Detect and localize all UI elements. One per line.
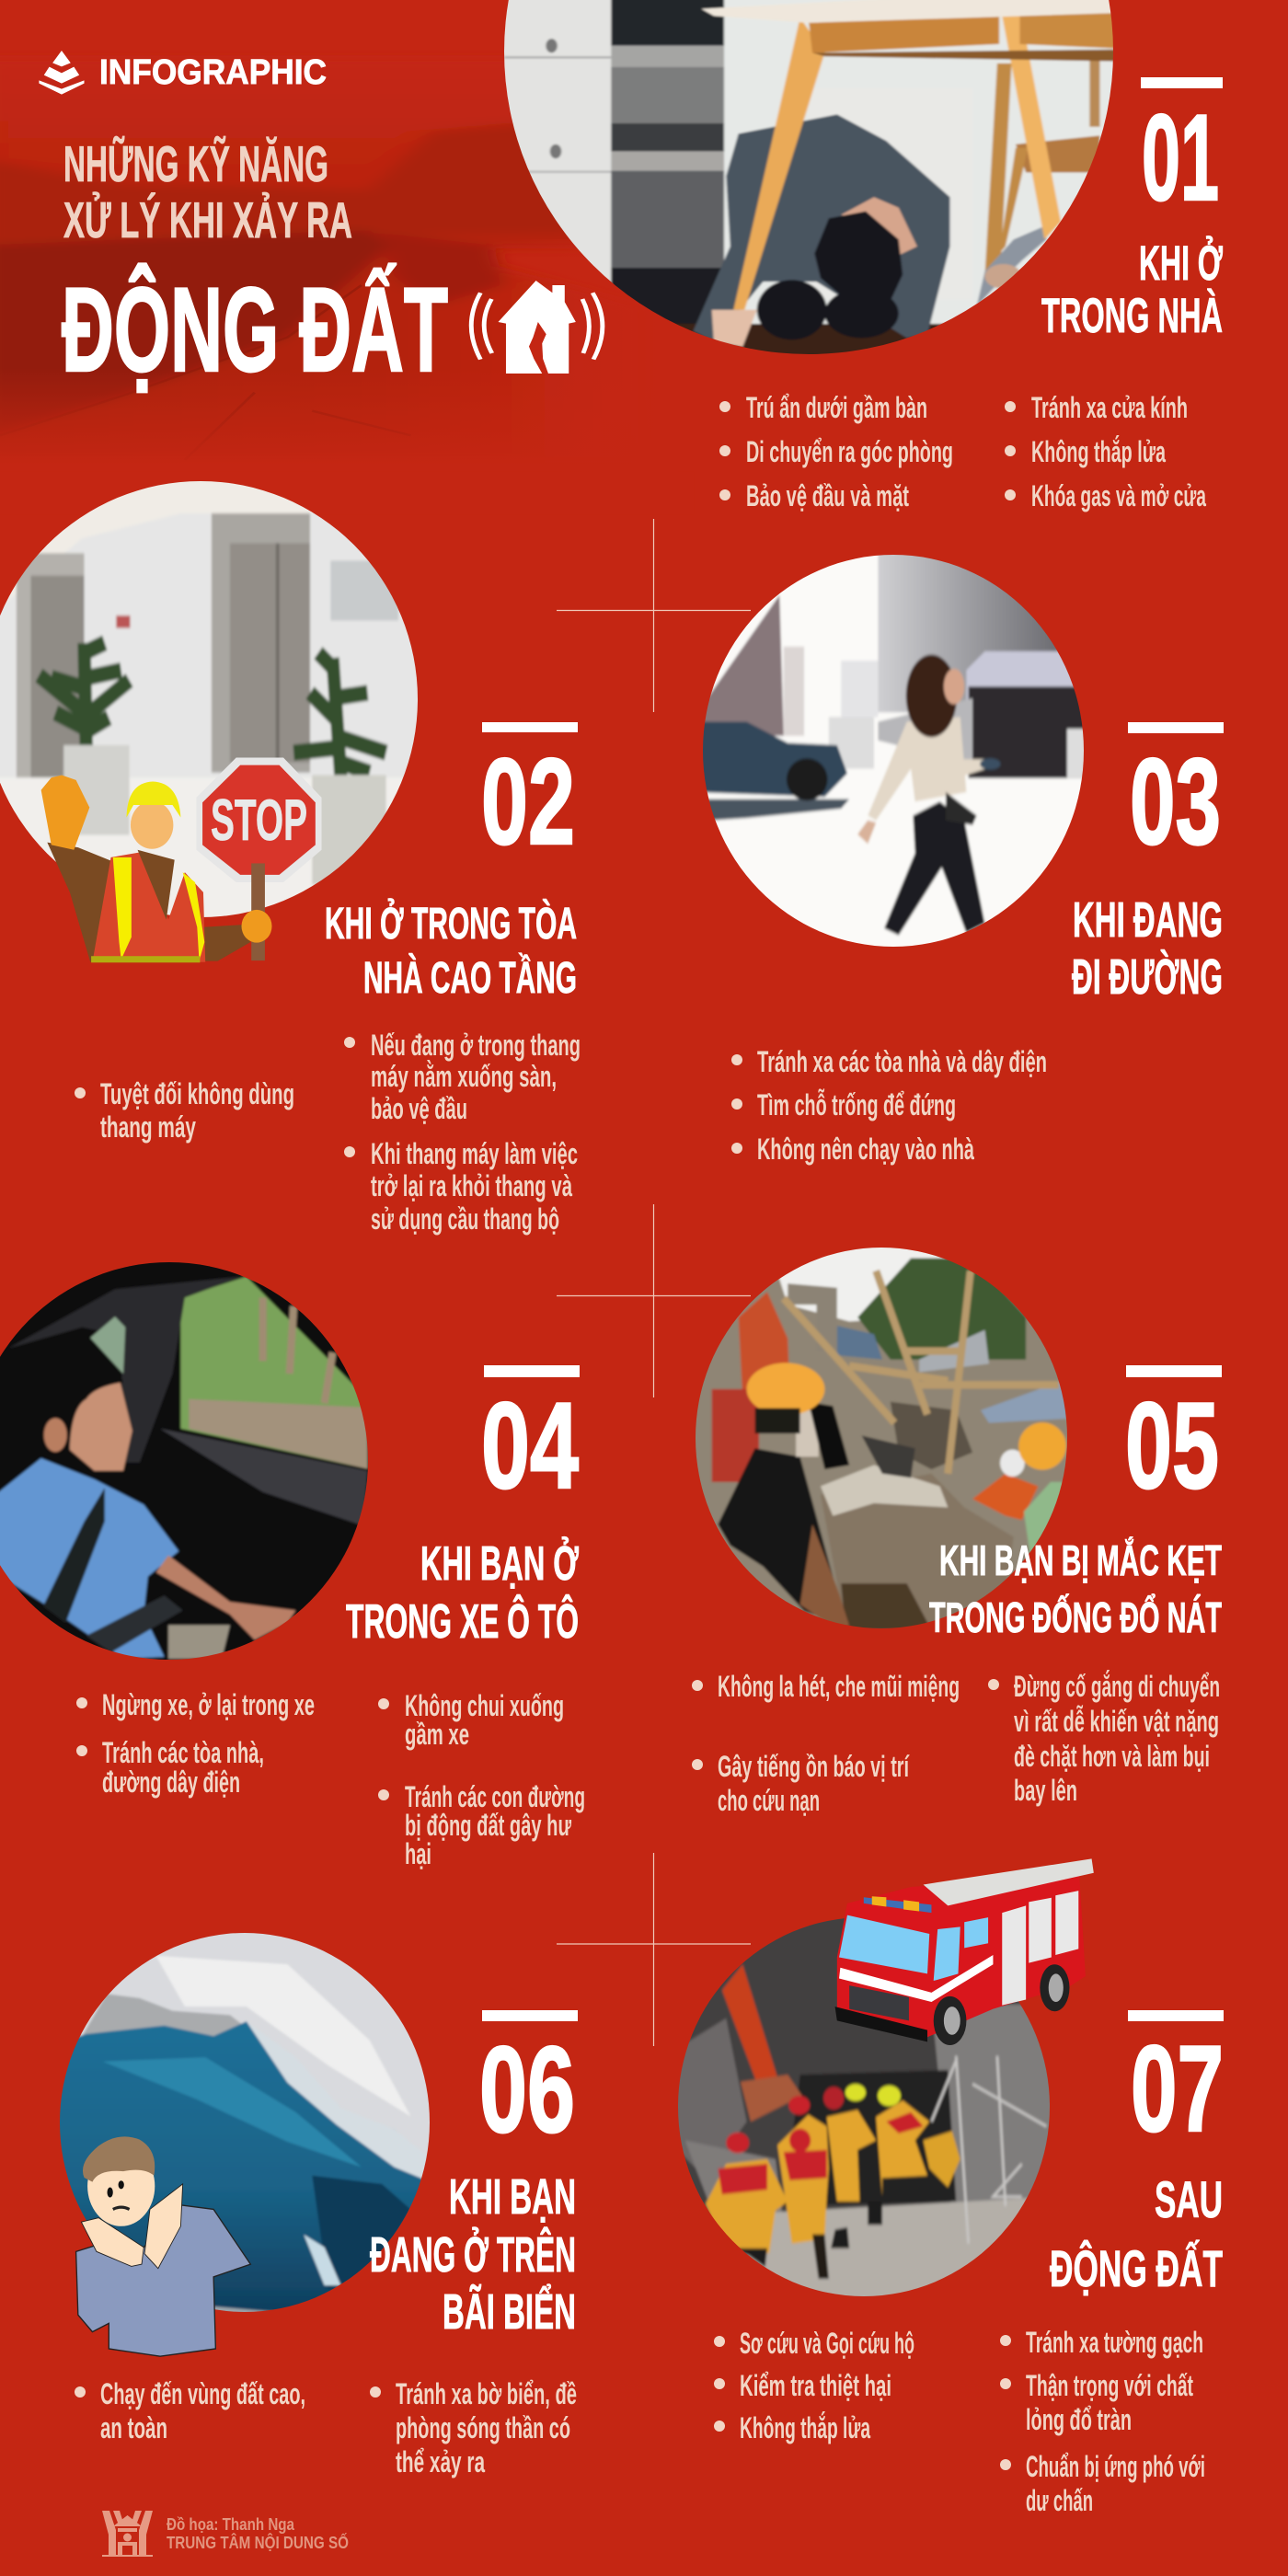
number 07: [1128, 2010, 1224, 2157]
panel: 05 trapped: [689, 1241, 1222, 1817]
bullets 07: Kiểm tra thiệt hại: [740, 2369, 891, 2402]
photo: man under table: [504, 0, 1113, 354]
bullets 02: [75, 1029, 581, 1236]
bullets 03: [731, 1045, 1047, 1166]
title: NHỮNG KỸ NĂNG: [63, 135, 328, 192]
bullets 04: [76, 1688, 585, 1870]
heading 06: ĐANG Ở TRÊN: [370, 2226, 576, 2283]
bullets 01: Không thắp lửa: [1031, 435, 1166, 468]
bullets 03: Không nên chạy vào nhà: [757, 1133, 974, 1166]
number 04: [481, 1365, 580, 1514]
brand name: INFOGRAPHIC: [99, 53, 327, 92]
photo: woman crossing street: [697, 544, 1092, 957]
panel: 06 on the beach: [53, 1926, 578, 2478]
bullets 02: sử dụng cầu thang bộ: [371, 1202, 559, 1236]
number 03: [1128, 722, 1224, 870]
bullets 03: Tránh xa các tòa nhà và dây điện: [757, 1045, 1047, 1078]
bullets 01: Trú ẩn dưới gầm bàn: [746, 391, 927, 424]
bullets 02: máy nằm xuống sàn,: [371, 1060, 557, 1093]
bullets 01: Bảo vệ đầu và mặt: [746, 479, 909, 512]
bullets 06: phòng sóng thần có: [396, 2411, 570, 2444]
panel: 04 in the car: [0, 1251, 585, 1870]
heading 04: [346, 1536, 579, 1649]
bullets 05: [692, 1670, 1220, 1817]
heading 02: KHI Ở TRONG TÒA: [325, 898, 577, 949]
bullets 04: bị động đất gây hư: [405, 1809, 572, 1842]
photo: big wave: [53, 1926, 435, 2319]
icon: fire truck: [835, 1858, 1094, 2045]
bullets 02: Tuyệt đối không dùng: [100, 1077, 294, 1110]
bullets 02: Nếu đang ở trong thang: [371, 1029, 581, 1062]
bullets 06: [75, 2377, 577, 2478]
bullets 04: Ngừng xe, ở lại trong xe: [102, 1688, 315, 1721]
footer credit: TRUNG TÂM NỘI DUNG SỐ: [167, 2533, 349, 2552]
bullets 02: trở lại ra khỏi thang và: [371, 1169, 572, 1202]
icon: shaking house: [471, 281, 603, 374]
heading 07: [1050, 2170, 1223, 2297]
title: [62, 135, 448, 397]
number 06: 06: [479, 2022, 575, 2158]
bullets 04: Không chui xuống: [405, 1689, 564, 1722]
panel: 07 after the earthquake: [673, 1858, 1224, 2517]
heading 04: KHI BẠN Ở: [420, 1536, 579, 1591]
number 07: 07: [1131, 2021, 1224, 2157]
number 02: 02: [481, 734, 575, 870]
panel: 03 walking: [697, 544, 1224, 1166]
heading 03: [1072, 892, 1223, 1005]
bullets 05: Không la hét, che mũi miệng: [718, 1670, 960, 1703]
heading 07: SAU: [1155, 2170, 1223, 2228]
footer credit: Đồ họa: Thanh Nga: [167, 2515, 295, 2534]
footer credit: [167, 2515, 349, 2552]
number 04: 04: [481, 1378, 579, 1514]
number 01: 01: [1142, 90, 1219, 226]
bullets 07: lỏng đổ tràn: [1026, 2403, 1132, 2436]
heading 06: BÃI BIỂN: [443, 2284, 576, 2340]
bullets 07: [714, 2326, 1205, 2517]
background photo: cracked road: [0, 58, 694, 514]
bullets 04: đường dây điện: [102, 1765, 240, 1799]
bullets 01: Di chuyển ra góc phòng: [746, 435, 953, 468]
bullets 06: an toàn: [100, 2411, 167, 2444]
bullets 05: Gây tiếng ồn báo vị trí: [718, 1750, 910, 1783]
number 02: [481, 722, 578, 870]
panel: 01 indoors: [502, 0, 1223, 512]
icon: worker with stop sign: STOP: [211, 788, 307, 853]
bullets 07: Sơ cứu và Gọi cứu hộ: [740, 2327, 914, 2360]
footer logo: [102, 2511, 153, 2557]
bullets 01: Tránh xa cửa kính: [1031, 391, 1188, 424]
photo: boy in car: [0, 1251, 378, 1670]
panel: 02 high-rise: [0, 474, 581, 1236]
bullets 06: thể xảy ra: [396, 2445, 485, 2478]
bullets 02: Khi thang máy làm việc: [371, 1137, 578, 1170]
bullets 07: dư chấn: [1026, 2484, 1093, 2517]
bullets 02: thang máy: [100, 1110, 196, 1144]
bullets 06: Chạy đến vùng đất cao,: [100, 2377, 305, 2410]
bullets 04: Tránh các tòa nhà,: [102, 1736, 264, 1769]
photo: elevators: [0, 474, 427, 927]
heading 02: [325, 898, 577, 1003]
bullets 03: Tìm chỗ trống để đứng: [757, 1088, 956, 1121]
number 03: 03: [1130, 734, 1221, 870]
bullets 04: Tránh các con đường: [405, 1780, 585, 1813]
photo: rescuers in rubble: [689, 1241, 1075, 1639]
number 05: [1125, 1365, 1222, 1514]
icon: worker with stop sign: [41, 758, 322, 962]
icon: man crossing arms: [76, 2136, 250, 2356]
heading 05: [929, 1536, 1222, 1641]
heading 04: TRONG XE Ô TÔ: [346, 1594, 579, 1649]
bullets 07: Không thắp lửa: [740, 2411, 870, 2444]
number 01: [1141, 77, 1223, 226]
number 06: [479, 2010, 578, 2158]
bullets 01: [719, 391, 1206, 512]
logo icon: [39, 51, 85, 95]
cross lines: [557, 519, 751, 2046]
bullets 06: Tránh xa bờ biển, đề: [396, 2377, 577, 2410]
heading 02: NHÀ CAO TẦNG: [363, 953, 577, 1003]
number 05: 05: [1125, 1378, 1219, 1514]
title: XỬ LÝ KHI XẢY RA: [63, 191, 352, 248]
heading 01: [1041, 236, 1223, 343]
heading 06: KHI BẠN: [449, 2169, 576, 2225]
heading 01: KHI Ở: [1139, 236, 1223, 291]
bullets 02: bảo vệ đầu: [371, 1092, 467, 1125]
photo: rescue team: [673, 1911, 1054, 2309]
bullets 04: hại: [405, 1837, 431, 1870]
bullets 05: bay lên: [1014, 1774, 1077, 1807]
bullets 04: gầm xe: [405, 1718, 469, 1751]
title: ĐỘNG ĐẤT: [62, 262, 448, 397]
heading 06: [370, 2169, 576, 2340]
bullets 05: cho cứu nạn: [718, 1784, 820, 1817]
